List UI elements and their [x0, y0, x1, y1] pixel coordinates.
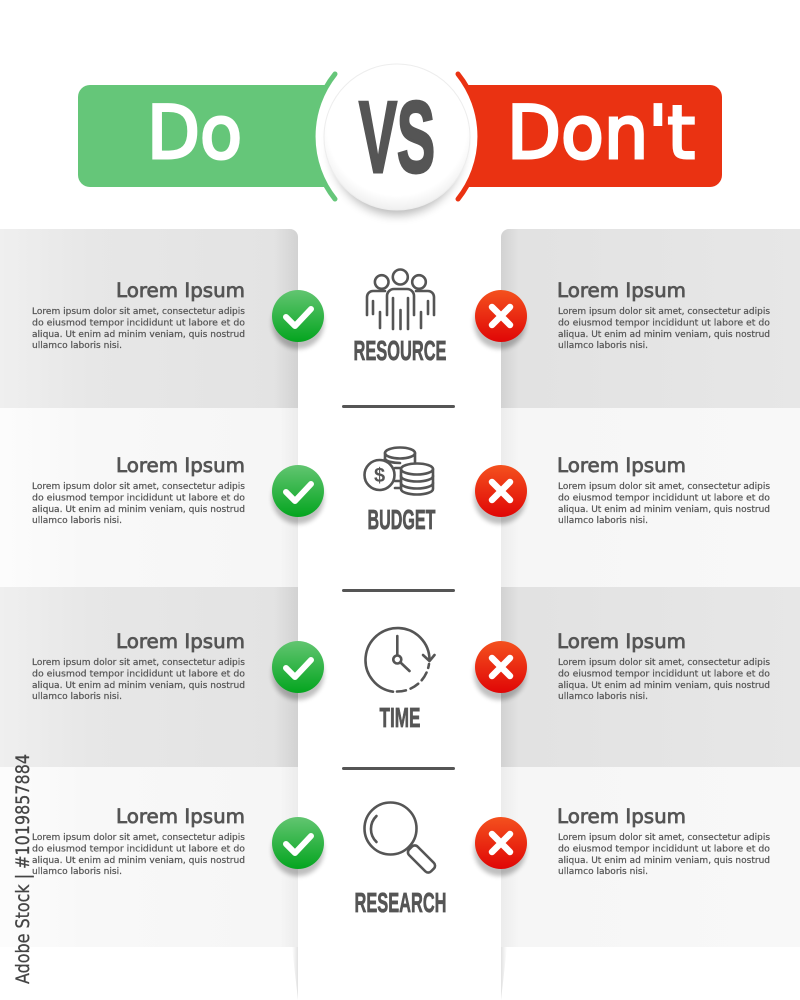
row 3 Don't text: do eiusmod tempor incididunt ut labore et do — [558, 670, 770, 680]
icon: magnifier (research) — [364, 802, 437, 874]
row 4 Don't text: aliqua. Ut enim ad minim veniam, quis nostrud — [558, 856, 770, 866]
icon: check row 1 — [272, 290, 324, 349]
row 2 Do text: do eiusmod tempor incididunt ut labore et do — [32, 494, 246, 504]
stock image id side label: Adobe Stock | #1019857884 — [12, 754, 34, 984]
VS badge: VS — [359, 82, 435, 194]
row 3 Don't text — [557, 630, 770, 702]
icon: check row 3 — [272, 641, 324, 700]
label: TIME: TIME — [380, 702, 420, 733]
row 1 Don't text: Lorem Ipsum — [557, 279, 686, 302]
row 3 Do text: Lorem ipsum dolor sit amet, consectetur adipis — [32, 658, 245, 668]
row 2 Don't text: aliqua. Ut enim ad minim veniam, quis nostrud — [558, 505, 770, 515]
banner: Do side: Do — [147, 91, 242, 176]
icon: clock (time) — [366, 628, 434, 692]
icon: cross row 1 — [474, 290, 527, 349]
row 1 Don't text: Lorem ipsum dolor sit amet, consectetur adipis — [558, 307, 770, 317]
row 1 Do text: Lorem Ipsum — [116, 279, 245, 302]
panel: right column backgrounds — [501, 229, 800, 1000]
row 2 Do text — [32, 454, 246, 526]
divider 1 — [342, 405, 455, 408]
row 2 Don't text — [557, 454, 770, 526]
icon: check row 2 — [272, 465, 324, 524]
row 3 Don't text: Lorem ipsum dolor sit amet, consectetur adipis — [558, 658, 770, 668]
row 4 Do text: Lorem Ipsum — [116, 805, 245, 828]
row 1 Do text: ullamco laboris nisi. — [32, 341, 122, 351]
row 4 Do text — [32, 805, 246, 877]
row 4 Don't text — [557, 805, 770, 877]
row 2 Do text: Lorem ipsum dolor sit amet, consectetur adipis — [32, 482, 245, 492]
row 1 Don't text: aliqua. Ut enim ad minim veniam, quis nostrud — [558, 330, 770, 340]
row 4 Don't text: do eiusmod tempor incididunt ut labore et do — [558, 844, 770, 854]
icon: coins (budget) — [364, 448, 433, 494]
row 4 Don't text: ullamco laboris nisi. — [558, 867, 648, 877]
banner: Do side — [78, 85, 340, 187]
row 1 Don't text: do eiusmod tempor incididunt ut labore et do — [558, 318, 770, 328]
icon: cross row 2 — [474, 465, 527, 524]
row 1 Do text: Lorem ipsum dolor sit amet, consectetur adipis — [32, 307, 245, 317]
row 3 Do text: Lorem Ipsum — [116, 630, 245, 653]
row 2 Do text: Lorem Ipsum — [116, 454, 245, 477]
row 3 Do text: aliqua. Ut enim ad minim veniam, quis nostrud — [32, 681, 245, 691]
icon: cross row 3 — [474, 641, 527, 700]
row 2 Don't text: Lorem ipsum dolor sit amet, consectetur adipis — [558, 482, 770, 492]
row 2 Don't text: do eiusmod tempor incididunt ut labore et do — [558, 494, 770, 504]
icon: people (resource) — [367, 270, 434, 329]
banner: Don't side: Don't — [507, 91, 695, 176]
row 3 Do text: ullamco laboris nisi. — [32, 692, 122, 702]
row 4 Don't text: Lorem ipsum dolor sit amet, consectetur adipis — [558, 833, 770, 843]
row 1 Don't text — [557, 279, 770, 351]
divider 2 — [342, 589, 455, 592]
label: RESEARCH: RESEARCH — [354, 887, 446, 918]
row 4 Do text: Lorem ipsum dolor sit amet, consectetur adipis — [32, 833, 245, 843]
panel: left column backgrounds — [0, 229, 298, 1000]
row 2 Don't text: Lorem Ipsum — [557, 454, 686, 477]
row 3 Do text: do eiusmod tempor incididunt ut labore et do — [32, 670, 246, 680]
row 3 Don't text: aliqua. Ut enim ad minim veniam, quis nostrud — [558, 681, 770, 691]
label: BUDGET: BUDGET — [368, 504, 436, 535]
row 2 Do text: aliqua. Ut enim ad minim veniam, quis nostrud — [32, 505, 245, 515]
VS badge — [313, 64, 480, 215]
icon: check row 4 — [272, 817, 324, 876]
icon: cross row 4 — [474, 817, 527, 876]
row 2 Do text: ullamco laboris nisi. — [32, 516, 122, 526]
row 1 Do text — [32, 279, 246, 351]
row 4 Don't text: Lorem Ipsum — [557, 805, 686, 828]
row 1 Do text: aliqua. Ut enim ad minim veniam, quis nostrud — [32, 330, 245, 340]
row 4 Do text: do eiusmod tempor incididunt ut labore et do — [32, 844, 246, 854]
row 3 Do text — [32, 630, 246, 702]
row 4 Do text: ullamco laboris nisi. — [32, 867, 122, 877]
banner: Don't side — [455, 85, 722, 187]
icon: coins (budget): $ — [374, 465, 385, 487]
row 4 Do text: aliqua. Ut enim ad minim veniam, quis nostrud — [32, 856, 245, 866]
divider 3 — [342, 767, 455, 770]
row 1 Do text: do eiusmod tempor incididunt ut labore et do — [32, 318, 246, 328]
label: RESOURCE: RESOURCE — [354, 335, 446, 366]
row 2 Don't text: ullamco laboris nisi. — [558, 516, 648, 526]
row 1 Don't text: ullamco laboris nisi. — [558, 341, 648, 351]
row 3 Don't text: Lorem Ipsum — [557, 630, 686, 653]
row 3 Don't text: ullamco laboris nisi. — [558, 692, 648, 702]
